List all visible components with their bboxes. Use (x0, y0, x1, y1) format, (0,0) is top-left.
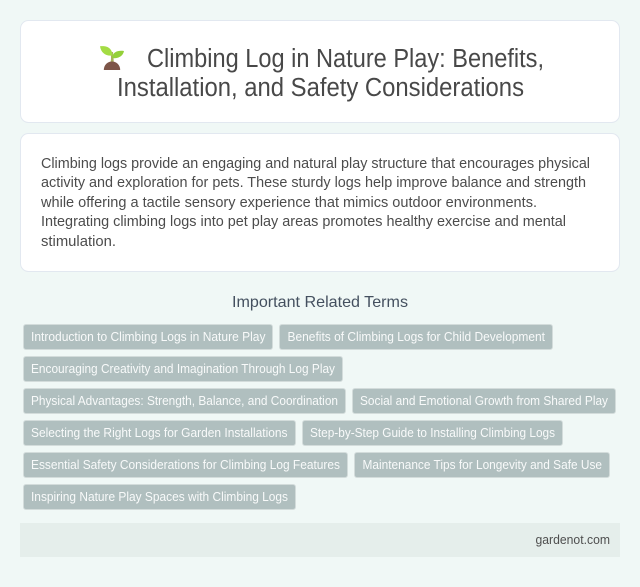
footer (20, 523, 620, 557)
tag: Physical Advantages: Strength, Balance, and Coordination (31, 394, 338, 408)
text block: description: Climbing logs provide an engaging and natural play structure that encourages physical (41, 155, 590, 172)
tag (24, 388, 346, 414)
title (117, 45, 544, 102)
tag (354, 452, 610, 478)
title: Climbing Log in Nature Play: Benefits, (147, 45, 544, 73)
tag (280, 324, 552, 350)
title: Installation, and Safety Considerations (117, 74, 524, 102)
text block: description: while offering a tactile sensory experience that mimics outdoor environments. (40, 194, 537, 211)
tag: Benefits of Climbing Logs for Child Development (288, 330, 545, 344)
icon: seedling (100, 46, 124, 70)
tag: Inspiring Nature Play Spaces with Climbing Logs (31, 490, 288, 504)
text block: description: stimulation. (41, 233, 116, 250)
tag (352, 388, 616, 414)
panel: title card (20, 20, 620, 122)
tag: Encouraging Creativity and Imagination Through Log Play (31, 362, 336, 376)
tag (24, 484, 296, 510)
tag: Selecting the Right Logs for Garden Installations (31, 426, 288, 440)
text block: description: Integrating climbing logs into pet play areas promotes healthy exercise and mental (41, 213, 566, 230)
text block: description: activity and exploration for pets. These sturdy logs help improve balance and strength (41, 174, 586, 191)
tag: Introduction to Climbing Logs in Nature Play (31, 330, 266, 344)
tag (24, 356, 342, 382)
tag: Step-by-Step Guide to Installing Climbing Logs (310, 426, 555, 440)
tag list (24, 324, 616, 510)
tag (24, 452, 348, 478)
text block: description (40, 155, 590, 250)
tag: Essential Safety Considerations for Climbing Log Features (31, 458, 340, 472)
panel: description card (20, 134, 620, 272)
tag (24, 324, 272, 350)
heading: important related terms: Important Related Terms (232, 294, 408, 311)
tag: Social and Emotional Growth from Shared Play (360, 394, 609, 408)
tag (302, 420, 562, 446)
tag: Maintenance Tips for Longevity and Safe Use (362, 458, 602, 472)
footer text: gardenot.com (536, 533, 610, 547)
tag (24, 420, 296, 446)
